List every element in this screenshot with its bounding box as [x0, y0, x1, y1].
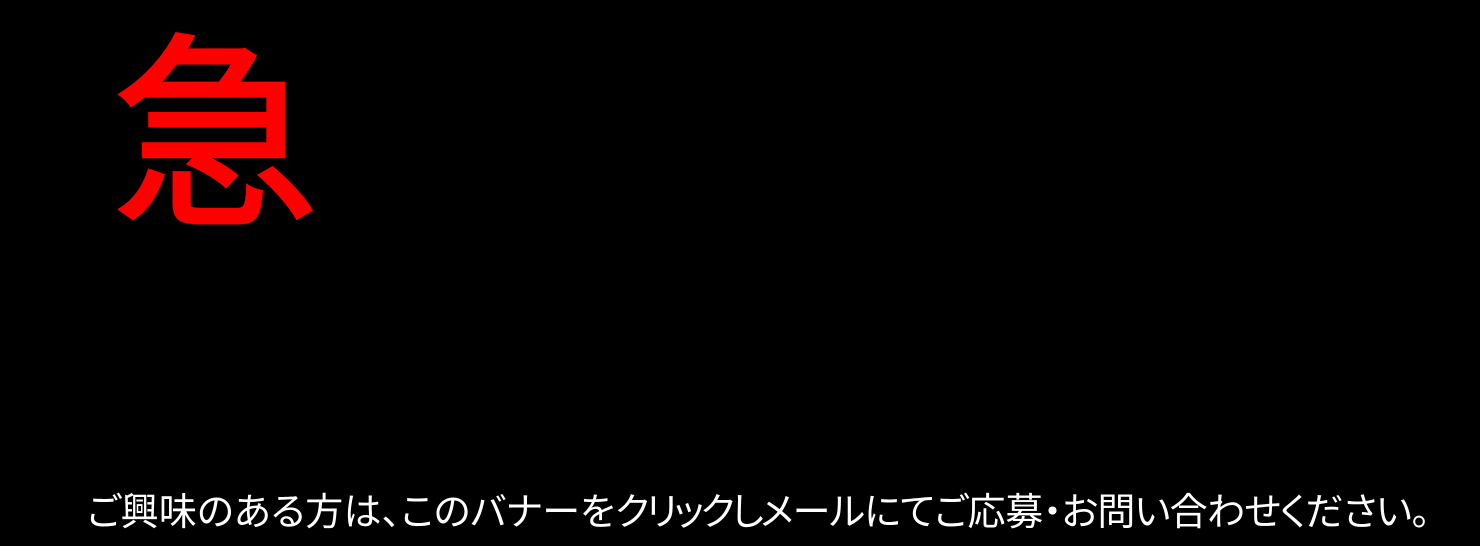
- text block: call to action: ご興味のある方は、このバナーをクリックしメールにてご応募・お問い合わせください。: [87, 492, 1429, 534]
- heading: large red kanji: 急: [111, 22, 319, 254]
